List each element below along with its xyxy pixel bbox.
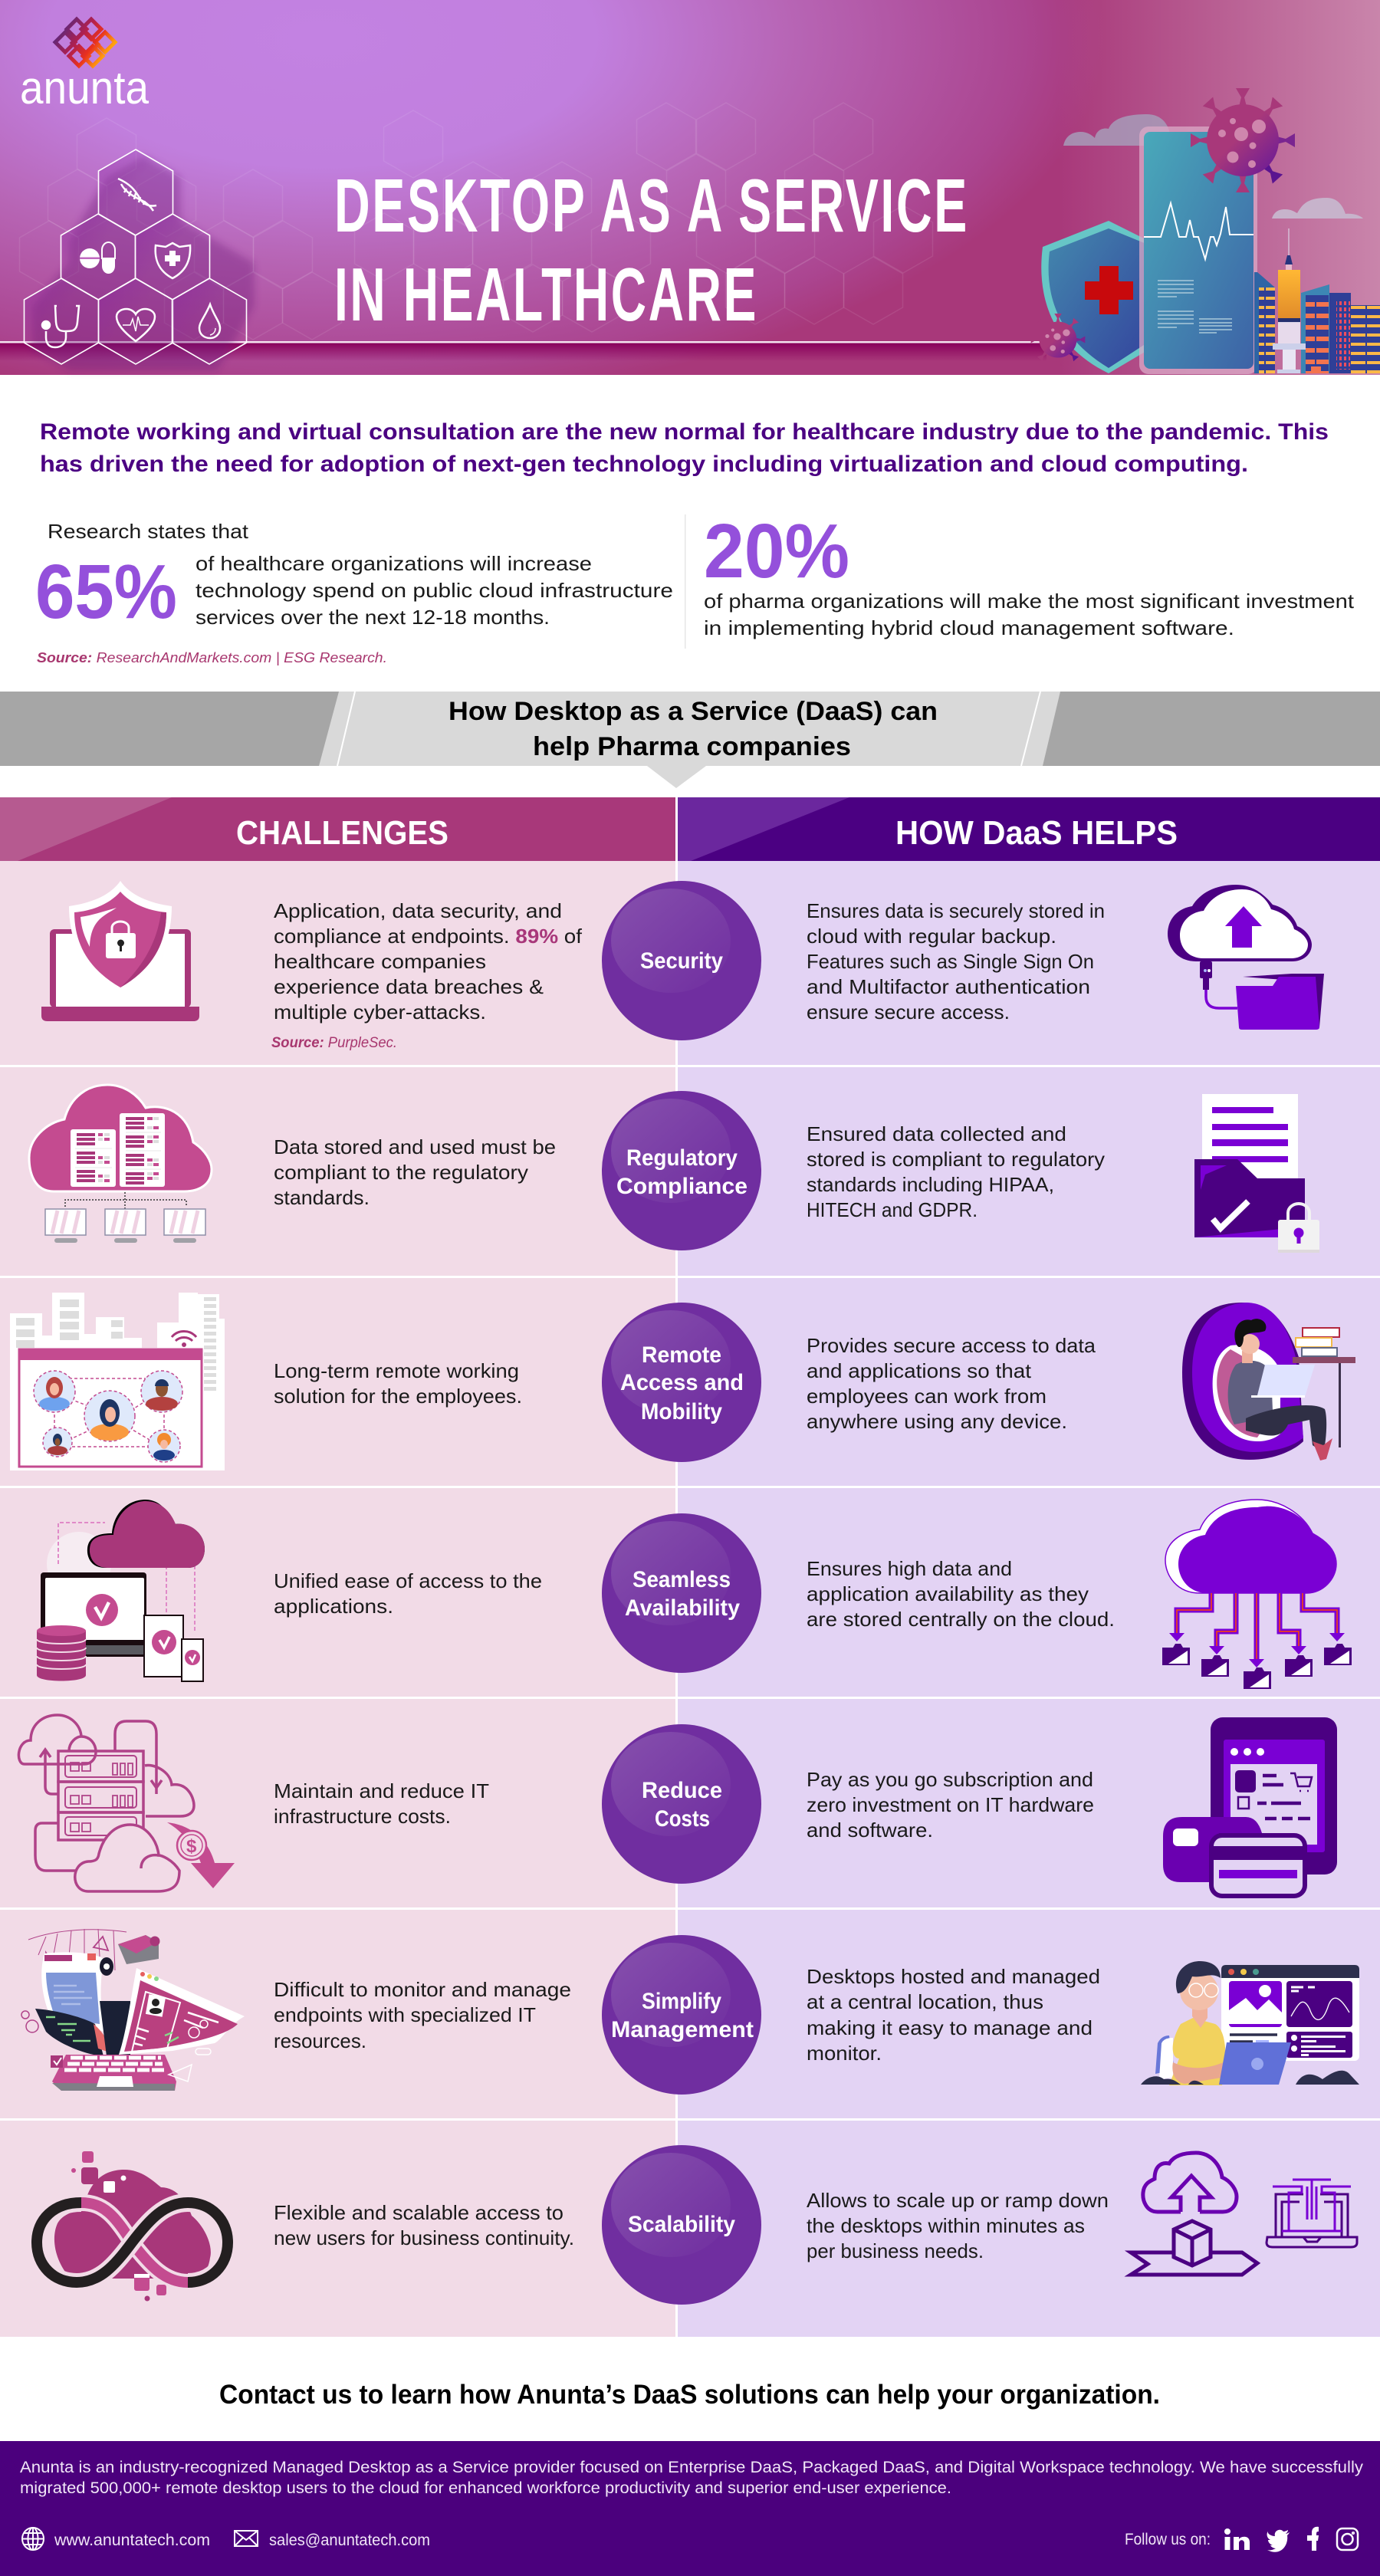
help text: HITECH and GDPR.	[807, 1198, 978, 1221]
header banner	[0, 0, 1380, 375]
help text	[807, 899, 1105, 1024]
company description: migrated 500,000+ remote desktop users to the cloud for enhanced workforce productivity and superior end-user experience.	[20, 2479, 951, 2497]
challenge text: Data stored and used must be	[274, 1135, 556, 1158]
challenge text	[274, 1359, 522, 1408]
label: remote access and mobility: Access and	[620, 1370, 744, 1395]
intro statement	[40, 419, 1329, 477]
syringe	[1273, 228, 1306, 373]
challenge text: Maintain and reduce IT	[274, 1779, 489, 1802]
icon: envelope	[235, 2531, 258, 2546]
medical hexagon cluster	[25, 150, 255, 370]
20% description: of pharma organizations will make the most significant investment	[704, 590, 1355, 613]
clouds	[1063, 114, 1363, 219]
row 6: simplify management	[0, 1910, 1380, 2118]
challenge text: compliant to the regulatory	[274, 1161, 528, 1184]
challenge text: endpoints with specialized IT	[274, 2003, 536, 2026]
phone	[1139, 127, 1257, 374]
label: simplify management	[611, 1989, 754, 2042]
challenge text	[274, 899, 583, 1024]
icon: cloud upload folder	[1168, 885, 1324, 1030]
help text: the desktops within minutes as	[807, 2214, 1085, 2237]
challenge text: Flexible and scalable access to	[274, 2201, 564, 2224]
row 7: scalability	[0, 2121, 1380, 2337]
help text: at a central location, thus	[807, 1990, 1043, 2013]
logo wordmark: anunta	[20, 62, 150, 113]
challenge text: Difficult to monitor and manage	[274, 1978, 571, 2001]
challenge text: healthcare companies	[274, 950, 486, 973]
label: remote access and mobility: Mobility	[641, 1399, 722, 1424]
shield	[1041, 221, 1150, 373]
challenge text	[274, 2201, 574, 2249]
section banner	[0, 692, 1380, 788]
icon: cost reduction arrow	[167, 1822, 235, 1888]
statistic: 65 percent: Research states that	[48, 520, 249, 543]
row 3: remote access and mobility	[0, 1278, 1380, 1486]
icon: facebook	[1307, 2527, 1319, 2551]
help text: making it easy to manage and	[807, 2016, 1092, 2039]
challenge text	[274, 1978, 571, 2052]
label: reduce costs: Reduce	[642, 1778, 722, 1803]
help text: and Multifactor authentication	[807, 975, 1090, 998]
website: www.anuntatech.com	[54, 2532, 210, 2549]
challenge text: Long-term remote working	[274, 1359, 519, 1382]
help text: Pay as you go subscription and	[807, 1768, 1093, 1791]
icon: twitter	[1267, 2530, 1290, 2552]
healthcare illustration: phone, shield, virus, syringe, city	[1031, 88, 1380, 374]
source note: Source: PurpleSec.	[271, 1035, 397, 1051]
help text: Ensures data is securely stored in	[807, 899, 1105, 922]
label: seamless availability: Seamless	[632, 1567, 731, 1592]
icon: pills	[80, 242, 115, 274]
challenge text: solution for the employees.	[274, 1385, 522, 1408]
intro statement: Remote working and virtual consultation are the new normal for healthcare industry due to the pandemic. This	[40, 419, 1329, 445]
challenge text: Application, data security, and	[274, 899, 562, 922]
challenge text: multiple cyber-attacks.	[274, 1001, 486, 1024]
65% description: technology spend on public cloud infrastructure	[196, 579, 673, 602]
label: reduce costs	[642, 1778, 722, 1832]
label: regulatory compliance	[616, 1145, 748, 1199]
icon: linkedin	[1224, 2528, 1250, 2550]
column header: how DaaS helps	[678, 797, 1380, 861]
help text	[807, 1122, 1105, 1221]
row 5: reduce costs	[0, 1699, 1380, 1907]
help text	[807, 1334, 1096, 1433]
challenge text: infrastructure costs.	[274, 1805, 451, 1828]
help text	[807, 2189, 1109, 2262]
challenge text: resources.	[274, 2029, 366, 2052]
title: DESKTOP AS A SERVICE	[334, 163, 969, 248]
icon: cloud devices database	[37, 1500, 205, 1681]
label: regulatory compliance: Compliance	[616, 1174, 748, 1199]
large virus	[1191, 88, 1295, 192]
20% description: in implementing hybrid cloud management software.	[704, 616, 1234, 639]
icon: dna	[118, 179, 156, 211]
background hexagon pattern	[20, 103, 932, 340]
banner pointer	[647, 766, 706, 788]
help text: standards including HIPAA,	[807, 1173, 1054, 1196]
label: security: Security	[640, 948, 723, 974]
icon: server clouds cost arrow	[18, 1715, 194, 1891]
icon: shield cross	[156, 243, 190, 278]
title: IN HEALTHCARE	[334, 252, 758, 337]
help text: ensure secure access.	[807, 1001, 1010, 1024]
help text: and applications so that	[807, 1359, 1032, 1382]
icon: stethoscope	[42, 306, 79, 347]
banner heading: How Desktop as a Service (DaaS) can	[449, 697, 938, 726]
label: simplify management: Management	[611, 2017, 754, 2042]
65% figure: 65%	[35, 549, 177, 635]
help text: Features such as Single Sign On	[807, 950, 1094, 973]
intro statement: has driven the need for adoption of next-gen technology including virtualization and cloud computing.	[40, 452, 1248, 477]
call to action: Contact us to learn how Anunta’s DaaS solutions can help your organization.	[219, 2380, 1160, 2410]
help text: application availability as they	[807, 1582, 1089, 1605]
20% description	[704, 590, 1355, 639]
help text: zero investment on IT hardware	[807, 1793, 1094, 1816]
column header: challenges	[0, 797, 675, 861]
icon: cloud distribution to folders	[1162, 1500, 1352, 1689]
statistic: 20 percent	[704, 508, 1355, 639]
help text: anywhere using any device.	[807, 1410, 1067, 1433]
source line: Source: ResearchAndMarkets.com | ESG Research.	[37, 650, 387, 665]
icon: person in chair with laptop	[1182, 1303, 1355, 1460]
column header: how DaaS helps: HOW DaaS HELPS	[895, 814, 1178, 852]
column header: challenges: CHALLENGES	[236, 814, 449, 852]
footer	[0, 2441, 1380, 2576]
help text: per business needs.	[807, 2239, 984, 2262]
icon: tablet and credit cards	[1163, 1717, 1337, 1896]
challenge text	[274, 1135, 556, 1209]
help text: Ensures high data and	[807, 1557, 1012, 1580]
label: remote access and mobility	[620, 1342, 744, 1424]
company description	[20, 2459, 1364, 2497]
icon: cloud upload box	[1131, 2153, 1257, 2275]
banner heading	[449, 697, 938, 761]
65% description: of healthcare organizations will increase	[196, 552, 592, 575]
icon: globe	[22, 2528, 44, 2550]
65% description	[196, 552, 673, 629]
challenge text: standards.	[274, 1186, 370, 1209]
label: seamless availability	[625, 1567, 740, 1621]
help text: Provides secure access to data	[807, 1334, 1096, 1357]
title	[334, 163, 969, 337]
icon: instagram	[1337, 2528, 1358, 2550]
icon: remote team network	[10, 1293, 225, 1470]
help text: employees can work from	[807, 1385, 1046, 1408]
help text: and software.	[807, 1819, 933, 1842]
label: reduce costs: Costs	[655, 1806, 710, 1832]
challenge text	[274, 1569, 542, 1618]
help text	[807, 1557, 1115, 1631]
anunta logo	[20, 19, 150, 113]
help text: cloud with regular backup.	[807, 925, 1056, 948]
city buildings	[1254, 272, 1380, 373]
icon: laptop shield	[41, 881, 199, 1021]
label: scalability: Scalability	[628, 2212, 735, 2237]
65% description: services over the next 12-18 months.	[196, 606, 550, 629]
help text: Desktops hosted and managed	[807, 1965, 1100, 1988]
challenge text: experience data breaches &	[274, 975, 544, 998]
statistic: 65 percent	[35, 520, 673, 635]
help text: monitor.	[807, 2042, 882, 2065]
header rule and band	[0, 341, 1046, 361]
icon: laptop circuit	[1267, 2179, 1357, 2247]
help text: Allows to scale up or ramp down	[807, 2189, 1109, 2212]
challenge text: compliance at endpoints. 89% of	[274, 925, 583, 948]
company description: Anunta is an industry-recognized Managed Desktop as a Service provider focused on Enterprise DaaS, Packaged DaaS, and Digital Workspace technology. We have successfully	[20, 2459, 1364, 2476]
help text	[807, 1768, 1094, 1842]
banner heading: help Pharma companies	[533, 732, 851, 761]
label: seamless availability: Availability	[625, 1595, 740, 1621]
row 4: seamless availability	[0, 1488, 1380, 1697]
small virus	[1031, 314, 1085, 366]
icon: cost reduction arrow: $	[186, 1836, 197, 1857]
icon: cloud servers	[29, 1085, 212, 1243]
challenge text: applications.	[274, 1595, 393, 1618]
icon: drop	[199, 304, 220, 338]
help text: stored is compliant to regulatory	[807, 1148, 1105, 1171]
20% figure: 20%	[704, 508, 849, 594]
challenge text: new users for business continuity.	[274, 2226, 574, 2249]
logo knot	[55, 19, 115, 66]
icon: heart ecg	[117, 309, 155, 341]
help text	[807, 1965, 1100, 2065]
social links: Follow us on:	[1125, 2531, 1211, 2548]
help text: are stored centrally on the cloud.	[807, 1608, 1115, 1631]
icon: laptop with floating windows	[21, 1929, 245, 2091]
row 2: regulatory compliance	[0, 1067, 1380, 1276]
help text: Ensured data collected and	[807, 1122, 1066, 1145]
icon: person with dashboard	[1141, 1961, 1359, 2085]
row 1: security	[0, 861, 1380, 1065]
label: simplify management: Simplify	[642, 1989, 721, 2014]
social links	[1125, 2527, 1358, 2552]
icon: document folder lock	[1194, 1094, 1319, 1253]
challenge text: Unified ease of access to the	[274, 1569, 542, 1592]
icon: infinity cloud	[37, 2151, 228, 2302]
label: remote access and mobility: Remote	[642, 1342, 721, 1368]
challenge text	[274, 1779, 489, 1828]
label: regulatory compliance: Regulatory	[626, 1145, 738, 1171]
email: sales@anuntatech.com	[269, 2532, 430, 2549]
